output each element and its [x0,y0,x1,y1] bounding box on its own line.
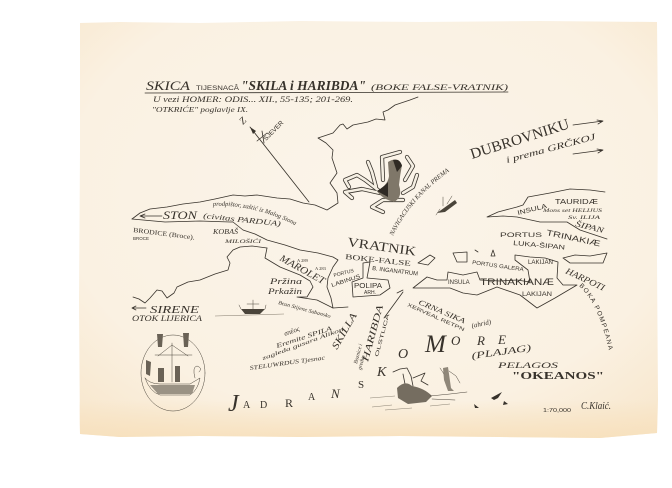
Sipan labels: TAURIDÆ [555,199,598,206]
Trinakia labels: TRINAKIANÆ [480,277,555,288]
Vratnik labels: ARH. [364,290,376,296]
Mljet peninsula labels: Bean Stijene Sabansko [277,300,331,320]
Ston labels: KOBAŠ [212,228,239,236]
Jadransko label: O [398,347,408,362]
title block: U vezi HOMER: ODIS... XII., 55-135; 201-269. [153,94,353,104]
Sipan labels [500,199,606,252]
north arrow [237,115,309,202]
medallion with ship [141,333,205,411]
Trinakia labels: LAKIJAN [522,292,552,298]
Ston labels: STON [163,208,198,222]
Sirene labels: OTOK LIJERICA [132,313,203,323]
Skilla strait labels: Eremite SPILA [274,325,333,350]
Jadransko label [228,347,408,417]
sea labels: PELAGOS [496,360,559,370]
sea labels: "OKEANOS" [512,370,604,382]
Jadransko label: A [243,400,251,411]
Haribda labels: HARIBDA [361,304,386,364]
title block [145,78,508,114]
Trinakia labels: INSULA [448,280,470,286]
Crna Sika labels: XERVEAL RETPN [406,302,466,333]
Skilla strait labels [249,310,360,372]
Jadransko label: D [260,400,267,411]
Skilla strait labels: σπέος [283,325,301,338]
Skilla strait labels: zagleda gusara Alikon [260,327,345,362]
sea labels: E [497,332,506,347]
Dubrovnik channel label: i prema GRČKOJ [505,131,598,165]
Trinakia labels [448,260,613,350]
Sipan labels: Sv. ILIJA [568,215,601,221]
ship with waterline [215,300,284,316]
island: Sipan [487,189,607,239]
Vratnik labels: B. INGANATRUM [372,266,418,278]
Crna Sika labels [384,290,492,333]
title block: TIJESNACÂ [196,83,240,92]
Dubrovnik channel label [390,117,604,236]
north arrow: SJEVER [262,119,286,142]
small ship [436,196,457,215]
sea labels: M [424,331,447,358]
Crna Sika labels: (ahrid) [471,318,492,330]
Vratnik labels: LABINUS [331,274,362,289]
Vratnik labels: POLIPA [354,281,382,290]
Mljet peninsula labels: A 289 [297,258,309,263]
Dubrovnik channel label: DUBROVNIKU [468,117,572,163]
Mljet peninsula labels: A 283 [315,266,327,271]
Sipan labels: LUKA-ŠIPAN [513,238,566,252]
island: Polipa [352,262,390,297]
Jadransko label: A [308,392,316,403]
Jadransko label: J [228,391,240,417]
Trinakia labels: LAKIJAN [528,260,553,266]
Jadransko label: K [376,365,387,380]
Mljet peninsula labels [267,252,331,320]
islets [418,250,495,265]
Vratnik labels: VRATNIK [347,234,418,259]
Ston labels [133,201,296,245]
Ston labels: BROCE [133,236,149,241]
Sirene labels: SIRENE [150,305,199,316]
Trinakia labels: HARPOTI [563,265,607,293]
island: Harpoti strip [563,253,607,263]
title block: SKICA [146,78,190,93]
sea labels: (PLAJAG) [471,343,532,362]
Sipan labels: ŠIPAN [575,218,606,235]
north arrow: Z [237,115,249,127]
Ston labels: BRODICE (Broce). [133,227,196,242]
scale: 1:70,000 [543,408,571,414]
sea labels [424,331,604,382]
Ston labels: prodpištor, zaštić iz Malog Stona [212,201,296,226]
title block: (BOKE FALSE-VRATNIK) [371,82,508,92]
Haribda labels: OLSTLICA [374,312,392,358]
island: Trinakia [413,255,577,308]
title block: "OTKRIĆE" poglavlje IX. [152,106,248,114]
Vratnik labels: PORTUS [333,268,355,279]
Trinakia labels: PORTUS GALERA [472,260,524,273]
small sea creatures [474,392,508,408]
Mljet peninsula labels: Prkažin [267,287,302,296]
Crna Sika labels: CRNA SIKA [417,298,467,326]
Sirene labels [132,305,203,323]
sea monster and figure [370,367,467,410]
paper sheet [79,21,658,438]
title block: "SKILA i HARIBDA" [241,79,366,94]
Jadransko label: R [285,396,293,410]
Jadransko label: N [330,386,341,401]
Haribda labels [353,304,392,371]
signature: C.Klaić. [581,401,611,412]
Skilla strait labels: SKILLA [330,310,360,352]
octopus [345,152,417,212]
Sipan labels: INSULA [517,203,548,217]
Sipan labels: TRINAKIÆ [546,228,601,248]
coastlines [132,97,418,308]
Skilla strait labels: STELUWRDUS Tjesnac [249,355,326,372]
Haribda labels: gredus [357,355,367,371]
sea labels: O [451,333,461,348]
Vratnik labels: BOKE-FALSE [345,252,412,268]
Jadransko label: S [358,379,364,391]
Ston labels: MILOŠIĆI [223,237,263,245]
Dubrovnik channel label: NAVIGACIJSKI KANAL PREMA [390,168,450,236]
Mljet peninsula labels: Pržina [269,277,302,286]
sea labels: R [476,333,485,348]
Ston labels: (civitas PARDUA) [203,211,282,228]
Haribda labels: Boznice i [353,343,364,365]
Vratnik labels [331,234,418,296]
Trinakia labels: BOKA POMPEANA [579,283,613,350]
Mljet peninsula labels: MAROLET [277,252,328,288]
Sipan labels: PORTUS [500,232,543,239]
Sipan labels: Mons set HELIJUS [542,208,602,214]
